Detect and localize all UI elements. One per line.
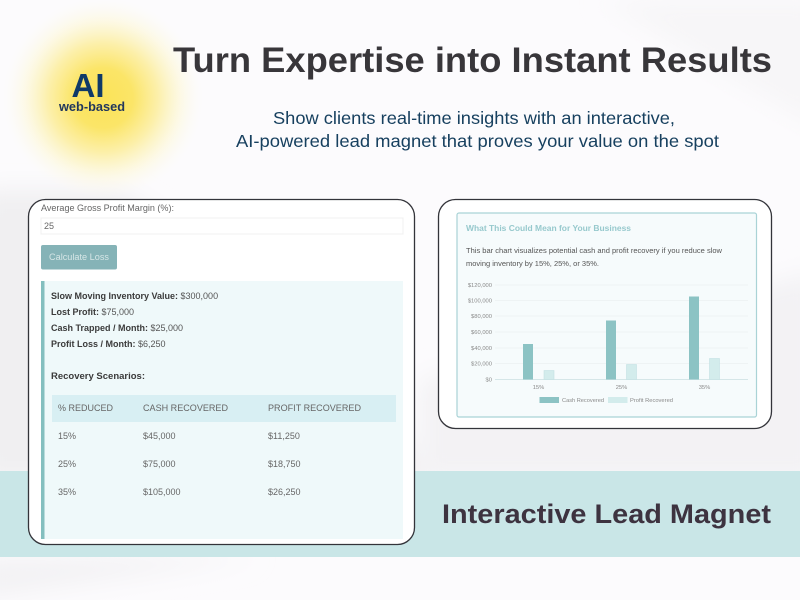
AI label: AI [72,67,104,104]
results summary: Profit Loss / Month: $6,250 [51,339,166,349]
y axis labels: $80,000 [471,314,492,320]
bottom teal band [0,471,800,557]
results summary: Cash Trapped / Month: $25,000 [51,323,183,333]
y axis labels: $20,000 [471,362,492,368]
legend [540,397,673,404]
recovery table: $75,000 [143,459,176,469]
recovery heading: Recovery Scenarios: [51,371,145,382]
cash bars [523,296,699,380]
recovery table: CASH RECOVERED [143,403,229,413]
recovery table: 25% [58,459,76,469]
panel frame [28,200,414,544]
y axis labels: $0 [486,378,492,384]
chart description: This bar chart visualizes potential cash and profit recovery if you reduce slow [466,246,723,255]
y axis labels: $40,000 [471,346,492,352]
chart card [457,213,756,417]
legend: Cash Recovered [562,398,604,404]
profit bars [544,358,720,380]
calculate button: Calculate Loss [49,252,109,262]
results summary: Lost Profit: $75,000 [51,307,134,317]
bar chart [468,283,748,404]
recovery table: $18,750 [268,459,301,469]
band label: Interactive Lead Magnet [442,499,771,529]
recovery table: $105,000 [143,487,181,497]
x axis labels: 25% [616,385,627,391]
title: Turn Expertise into Instant Results [173,41,772,80]
x axis labels [533,385,710,391]
panel: calculator [28,200,414,544]
recovery table: PROFIT RECOVERED [268,403,361,413]
margin input: 25 [44,221,54,231]
web-based label: web-based [58,100,125,114]
margin field label: Average Gross Profit Margin (%): [41,203,174,213]
y axis labels: $120,000 [468,283,492,289]
chart description: moving inventory by 15%, 25%, or 35%. [466,259,599,268]
recovery table: $45,000 [143,431,176,441]
results summary [51,291,218,349]
recovery table: % REDUCED [58,403,113,413]
icon: yellow glow [3,0,203,198]
subtitle: AI-powered lead magnet that proves your value on the spot [236,131,719,151]
results summary: Slow Moving Inventory Value: $300,000 [51,291,218,301]
chart heading: What This Could Mean for Your Business [466,223,631,233]
AI badge [3,0,203,198]
subtitle: Show clients real-time insights with an interactive, [273,108,675,128]
legend: Profit Recovered [630,398,673,404]
results box [41,281,403,539]
subtitle [236,108,719,151]
margin input [41,218,403,234]
recovery table [52,395,396,497]
chart description [466,246,723,268]
calculator content [41,203,403,539]
calculate button [41,245,117,270]
recovery table: 35% [58,487,76,497]
panel: chart [438,200,772,428]
panel frame [438,200,772,428]
y axis labels [468,283,492,384]
recovery table: 15% [58,431,76,441]
y axis labels: $100,000 [468,298,492,304]
x axis labels: 15% [533,385,544,391]
x axis labels: 35% [699,385,710,391]
recovery table: $11,250 [268,431,300,441]
y axis labels: $60,000 [471,330,492,336]
recovery table: $26,250 [268,487,301,497]
